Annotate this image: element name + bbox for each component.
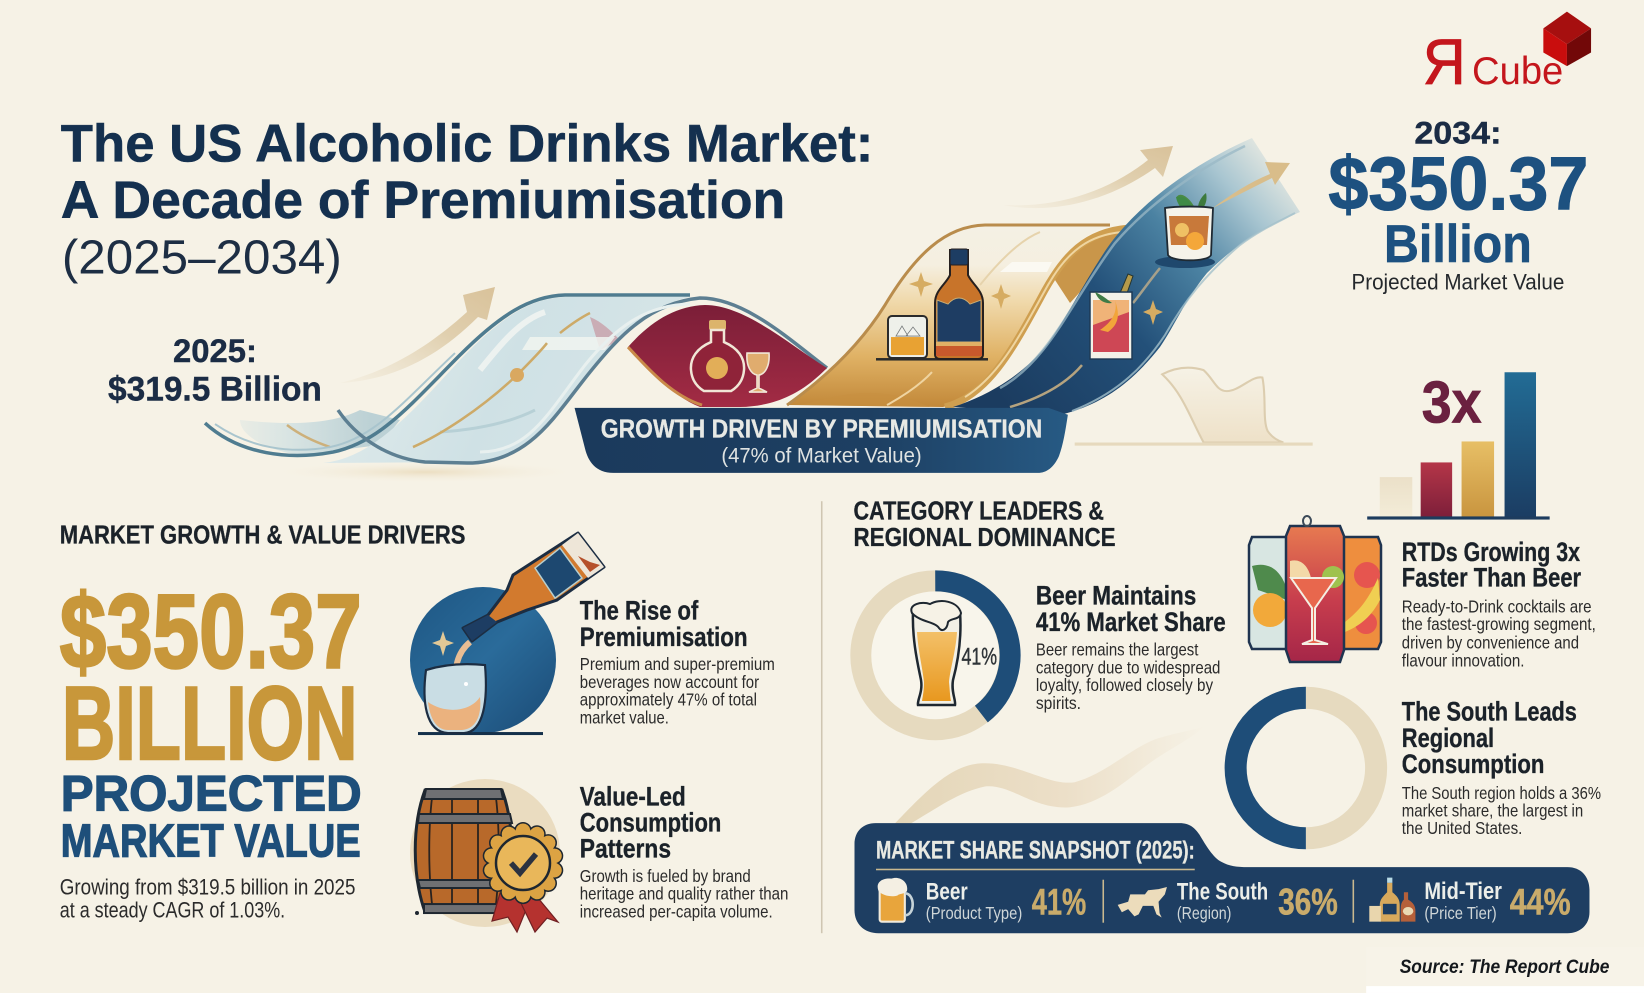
title: A Decade of Premiumisation xyxy=(61,172,785,230)
text: beer maintains share: loyalty, followed closely by xyxy=(1036,675,1213,695)
callout: 2025 value: 2025: xyxy=(173,333,257,369)
text: value-led consumption: Patterns xyxy=(580,833,671,864)
donut chart: beer share xyxy=(861,581,1010,730)
text: RTDs growing: Ready-to-Drink cocktails are xyxy=(1402,596,1592,616)
donut chart: the south share xyxy=(1236,698,1376,838)
big stat: projected value: MARKET VALUE xyxy=(61,815,361,867)
text: value-led consumption xyxy=(580,780,788,921)
text: RTDs growing: driven by convenience and xyxy=(1402,633,1579,653)
banner: growth driven by premiumisation xyxy=(575,408,1068,473)
banner: growth driven by premiumisation: (47% of Market Value) xyxy=(721,444,922,467)
text: the south leads: the United States. xyxy=(1402,818,1522,838)
text: rise of premiumisation: The Rise of xyxy=(580,595,699,626)
big stat: projected value xyxy=(60,573,362,867)
text: beer maintains share: Beer Maintains xyxy=(1036,579,1196,610)
text: RTDs growing: flavour innovation. xyxy=(1402,650,1524,670)
icon: cognac decanter and wine glass xyxy=(691,320,769,392)
heading: REGIONAL DOMINANCE xyxy=(853,522,1116,552)
text: beer maintains share: 41% Market Share xyxy=(1036,606,1226,637)
icon: beer glass xyxy=(911,601,961,705)
text: RTDs growing: the fastest-growing segment, xyxy=(1402,614,1596,634)
icon: barrel with quality badge xyxy=(410,779,563,932)
source note xyxy=(1366,947,1644,993)
stat: beer: 41% xyxy=(1032,881,1086,922)
stat: mid-tier xyxy=(1369,878,1571,923)
big stat: projected value: BILLION xyxy=(62,665,358,781)
callout: 2034 value: 2034: xyxy=(1414,116,1501,151)
ground shadow xyxy=(265,461,585,483)
text: RTDs growing: RTDs Growing 3x xyxy=(1402,536,1580,567)
text: growth note xyxy=(60,874,355,922)
big stat: projected value: $350.37 xyxy=(60,573,362,690)
panel: market growth and value drivers xyxy=(60,520,788,932)
growth ribbon illustration xyxy=(205,138,1300,483)
icon: bottle pouring into glass xyxy=(410,533,604,735)
stat: mid-tier: Mid-Tier xyxy=(1424,878,1502,905)
ribbon: gold segment xyxy=(787,225,1110,407)
text: value-led consumption: increased per-capita volume. xyxy=(580,901,773,921)
decorative paper shape xyxy=(1162,368,1283,443)
text: beer maintains share: Beer remains the largest xyxy=(1036,639,1199,659)
text: the south leads: Regional xyxy=(1402,722,1494,753)
text: beer maintains share: spirits. xyxy=(1036,693,1081,713)
panel: category leaders and regional dominance xyxy=(853,496,1601,933)
label: 41 percent: 41% xyxy=(961,643,997,670)
icon: RTD cans xyxy=(1249,516,1381,662)
heading xyxy=(853,496,1116,552)
stat: the south: 36% xyxy=(1278,881,1338,922)
icon: whiskey bottle and tumbler xyxy=(876,249,988,361)
text: beer maintains share xyxy=(1036,579,1226,713)
ribbon: gold fold behind xyxy=(1055,227,1128,303)
title: (2025–2034) xyxy=(62,231,342,285)
sparkles xyxy=(909,272,1163,325)
heading: MARKET SHARE SNAPSHOT (2025): xyxy=(876,837,1195,865)
text: the south leads: market share, the largest in xyxy=(1402,800,1583,820)
ribbon: blue segment xyxy=(953,138,1300,415)
icon: mid-tier bottles xyxy=(1369,878,1415,922)
callout: 2025 value xyxy=(108,333,322,409)
decorative wave xyxy=(893,726,1206,825)
text: rise of premiumisation: market value. xyxy=(580,707,669,727)
text: rise of premiumisation: beverages now account for xyxy=(580,672,759,692)
ground line xyxy=(1075,443,1313,446)
stat: mid-tier: (Price Tier) xyxy=(1424,903,1497,923)
title: The US Alcoholic Drinks Market: xyxy=(61,116,873,174)
logo: RCube xyxy=(1423,12,1591,98)
panel: market share snapshot xyxy=(855,823,1589,933)
bar chart: 3x growth: 3x xyxy=(1422,369,1481,436)
icon: beer mug xyxy=(878,878,913,922)
banner: growth driven by premiumisation: GROWTH DRIVEN BY PREMIUMISATION xyxy=(601,413,1042,443)
text: rise of premiumisation: approximately 47% of total xyxy=(580,690,757,710)
icon: southern US map xyxy=(1118,887,1167,917)
arrow: third arrow on blue ribbon xyxy=(1213,162,1290,208)
ribbon: maroon segment xyxy=(628,305,827,407)
text: rise of premiumisation: Premium and super-premium xyxy=(580,654,775,674)
text: value-led consumption: Value-Led xyxy=(580,780,686,811)
callout: 2034 value xyxy=(1328,116,1588,294)
stat: mid-tier: 44% xyxy=(1510,881,1571,922)
text: RTDs growing: Faster Than Beer xyxy=(1402,562,1581,593)
ribbon: glass segment xyxy=(205,295,827,463)
text: the south leads: Consumption xyxy=(1402,748,1544,779)
text: beer maintains share: category due to widespread xyxy=(1036,658,1220,678)
stat: the south xyxy=(1118,879,1338,923)
stat: beer: (Product Type) xyxy=(926,903,1022,923)
stat: the south: The South xyxy=(1177,879,1268,906)
text: growth note: at a steady CAGR of 1.03%. xyxy=(60,897,285,922)
text: growth note: Growing from $319.5 billion in 2025 xyxy=(60,874,355,899)
callout: 2034 value: Projected Market Value xyxy=(1351,269,1564,294)
source note: Source: The Report Cube xyxy=(1400,956,1610,978)
heading: MARKET GROWTH & VALUE DRIVERS xyxy=(60,520,466,550)
title xyxy=(61,116,873,285)
arrow: first beige growth arrow xyxy=(340,287,495,383)
callout: 2034 value: Billion xyxy=(1384,216,1532,274)
icon: highball cocktail xyxy=(1090,274,1133,359)
stat: beer xyxy=(878,878,1086,923)
text: value-led consumption: Growth is fueled by brand xyxy=(580,866,751,886)
text: RTDs growing xyxy=(1402,536,1596,670)
stat: the south: (Region) xyxy=(1177,903,1231,923)
logo: RCube: Я xyxy=(1423,25,1466,98)
callout: 2034 value: $350.37 xyxy=(1328,142,1588,226)
icon: red cube xyxy=(1543,12,1591,66)
text: rise of premiumisation xyxy=(580,595,775,727)
section divider xyxy=(821,501,823,933)
logo: RCube: Cube xyxy=(1472,50,1563,93)
text: the south leads: The South Leads xyxy=(1402,695,1577,726)
text: rise of premiumisation: Premiumisation xyxy=(580,621,748,652)
icon: orange cocktail xyxy=(1155,193,1215,268)
bar chart: 3x growth xyxy=(1367,369,1550,520)
text: value-led consumption: Consumption xyxy=(580,806,721,837)
stat: beer: Beer xyxy=(926,879,968,906)
callout: 2025 value: $319.5 Billion xyxy=(108,371,322,409)
arrow: second beige growth arrow xyxy=(1003,146,1173,208)
text: the south leads xyxy=(1402,695,1601,838)
text: the south leads: The South region holds a 36% xyxy=(1402,783,1601,803)
heading: CATEGORY LEADERS & xyxy=(853,496,1104,526)
big stat: projected value: PROJECTED xyxy=(61,765,362,822)
text: value-led consumption: heritage and quality rather than xyxy=(580,884,788,904)
